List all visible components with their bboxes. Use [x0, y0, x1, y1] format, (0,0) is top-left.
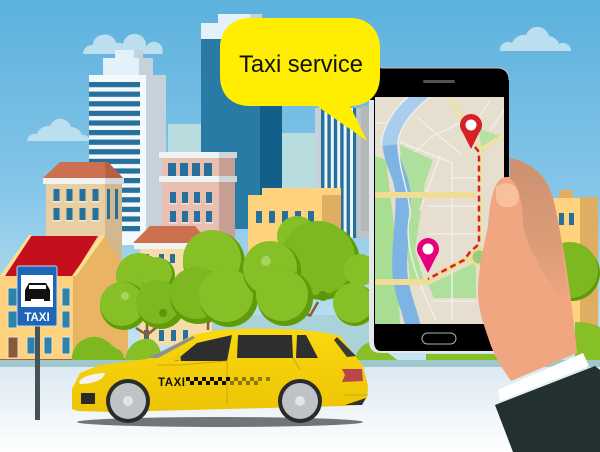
sign label: TAXI	[24, 312, 50, 324]
red map pin	[460, 114, 482, 149]
car lettering: TAXI	[158, 377, 185, 389]
hand	[478, 158, 577, 381]
magenta map pin	[417, 238, 439, 273]
suit sleeve	[495, 366, 600, 452]
clouds	[27, 27, 571, 141]
bushes	[72, 322, 600, 362]
map	[375, 92, 504, 330]
phone home button	[422, 333, 456, 344]
taxi stop sign	[17, 266, 57, 420]
blue skyscraper	[201, 14, 282, 229]
tan building	[43, 162, 124, 274]
phone	[361, 68, 509, 353]
speech bubble	[220, 18, 380, 141]
blue base behind trees	[212, 315, 372, 365]
white skyscraper	[89, 50, 166, 245]
thumbnail	[496, 183, 519, 207]
phone speaker	[423, 80, 455, 83]
orange building right	[550, 190, 598, 326]
bubble text: Taxi service	[239, 51, 363, 78]
house	[0, 234, 128, 362]
road kerb and pavement	[0, 360, 600, 452]
car shadow	[77, 417, 363, 427]
pale background buildings	[168, 124, 318, 234]
striped tower behind phone	[315, 108, 371, 238]
route dashed line	[428, 147, 479, 279]
taxi car	[72, 329, 368, 423]
tree trunks	[136, 300, 318, 340]
trees	[100, 216, 600, 330]
pink building	[159, 152, 237, 258]
shirt cuff	[498, 353, 589, 401]
checker stripe	[186, 377, 230, 385]
orange building centre	[248, 188, 341, 255]
small pitched-roof building	[133, 226, 230, 345]
